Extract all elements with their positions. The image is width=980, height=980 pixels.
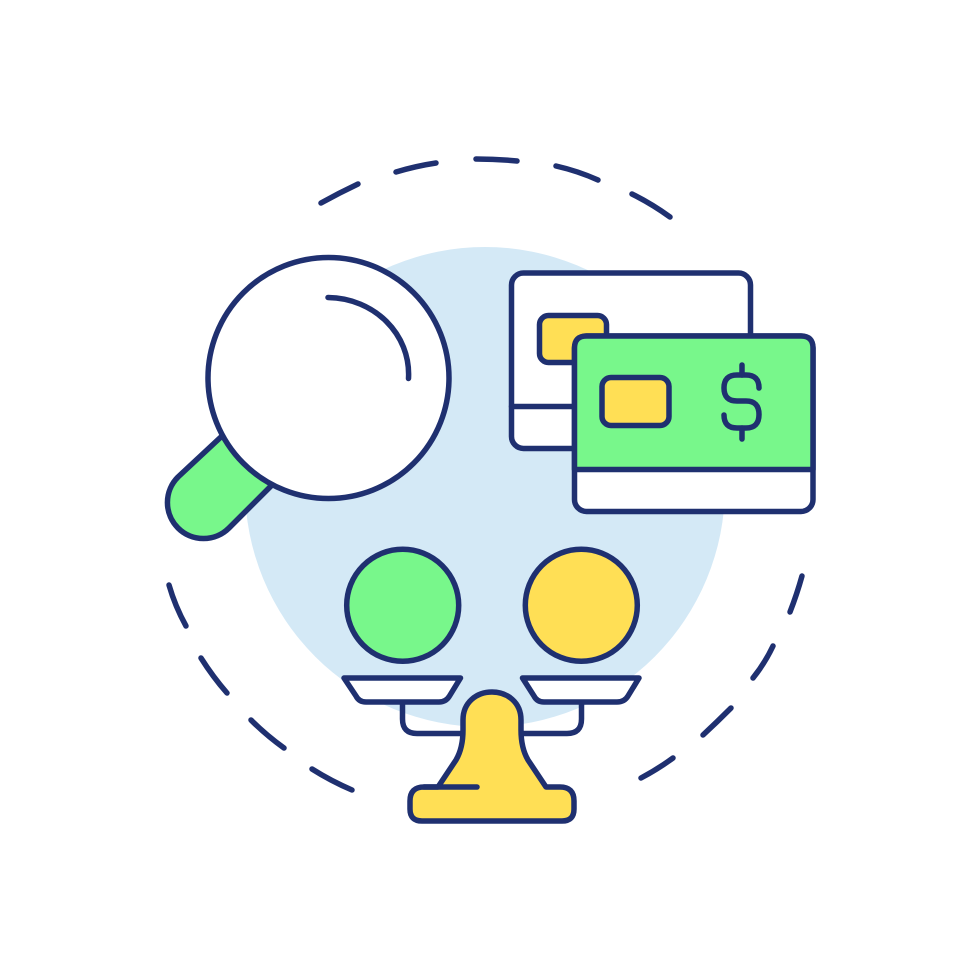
right pan xyxy=(522,678,639,702)
magnifier handle xyxy=(167,436,272,539)
left pan xyxy=(344,678,460,702)
icon: front green card xyxy=(574,336,813,512)
green card face xyxy=(574,336,813,470)
green ball xyxy=(347,549,459,661)
back card stripe line xyxy=(512,404,575,409)
scale beam xyxy=(402,702,582,734)
lens highlight xyxy=(328,298,409,378)
yellow ball xyxy=(525,549,637,661)
icon: balance scale xyxy=(344,549,639,821)
dashed ring: lower arc xyxy=(169,576,802,790)
magnifier lens xyxy=(208,258,449,498)
front card chip xyxy=(602,378,669,426)
scale base xyxy=(410,692,574,821)
dashed ring: top arc xyxy=(321,159,670,217)
dollar sign xyxy=(724,365,759,439)
base inner line xyxy=(424,784,477,790)
icon: back credit card xyxy=(512,273,750,448)
background circle xyxy=(245,247,725,727)
icon: magnifying glass xyxy=(167,258,449,539)
back card chip xyxy=(540,316,606,362)
